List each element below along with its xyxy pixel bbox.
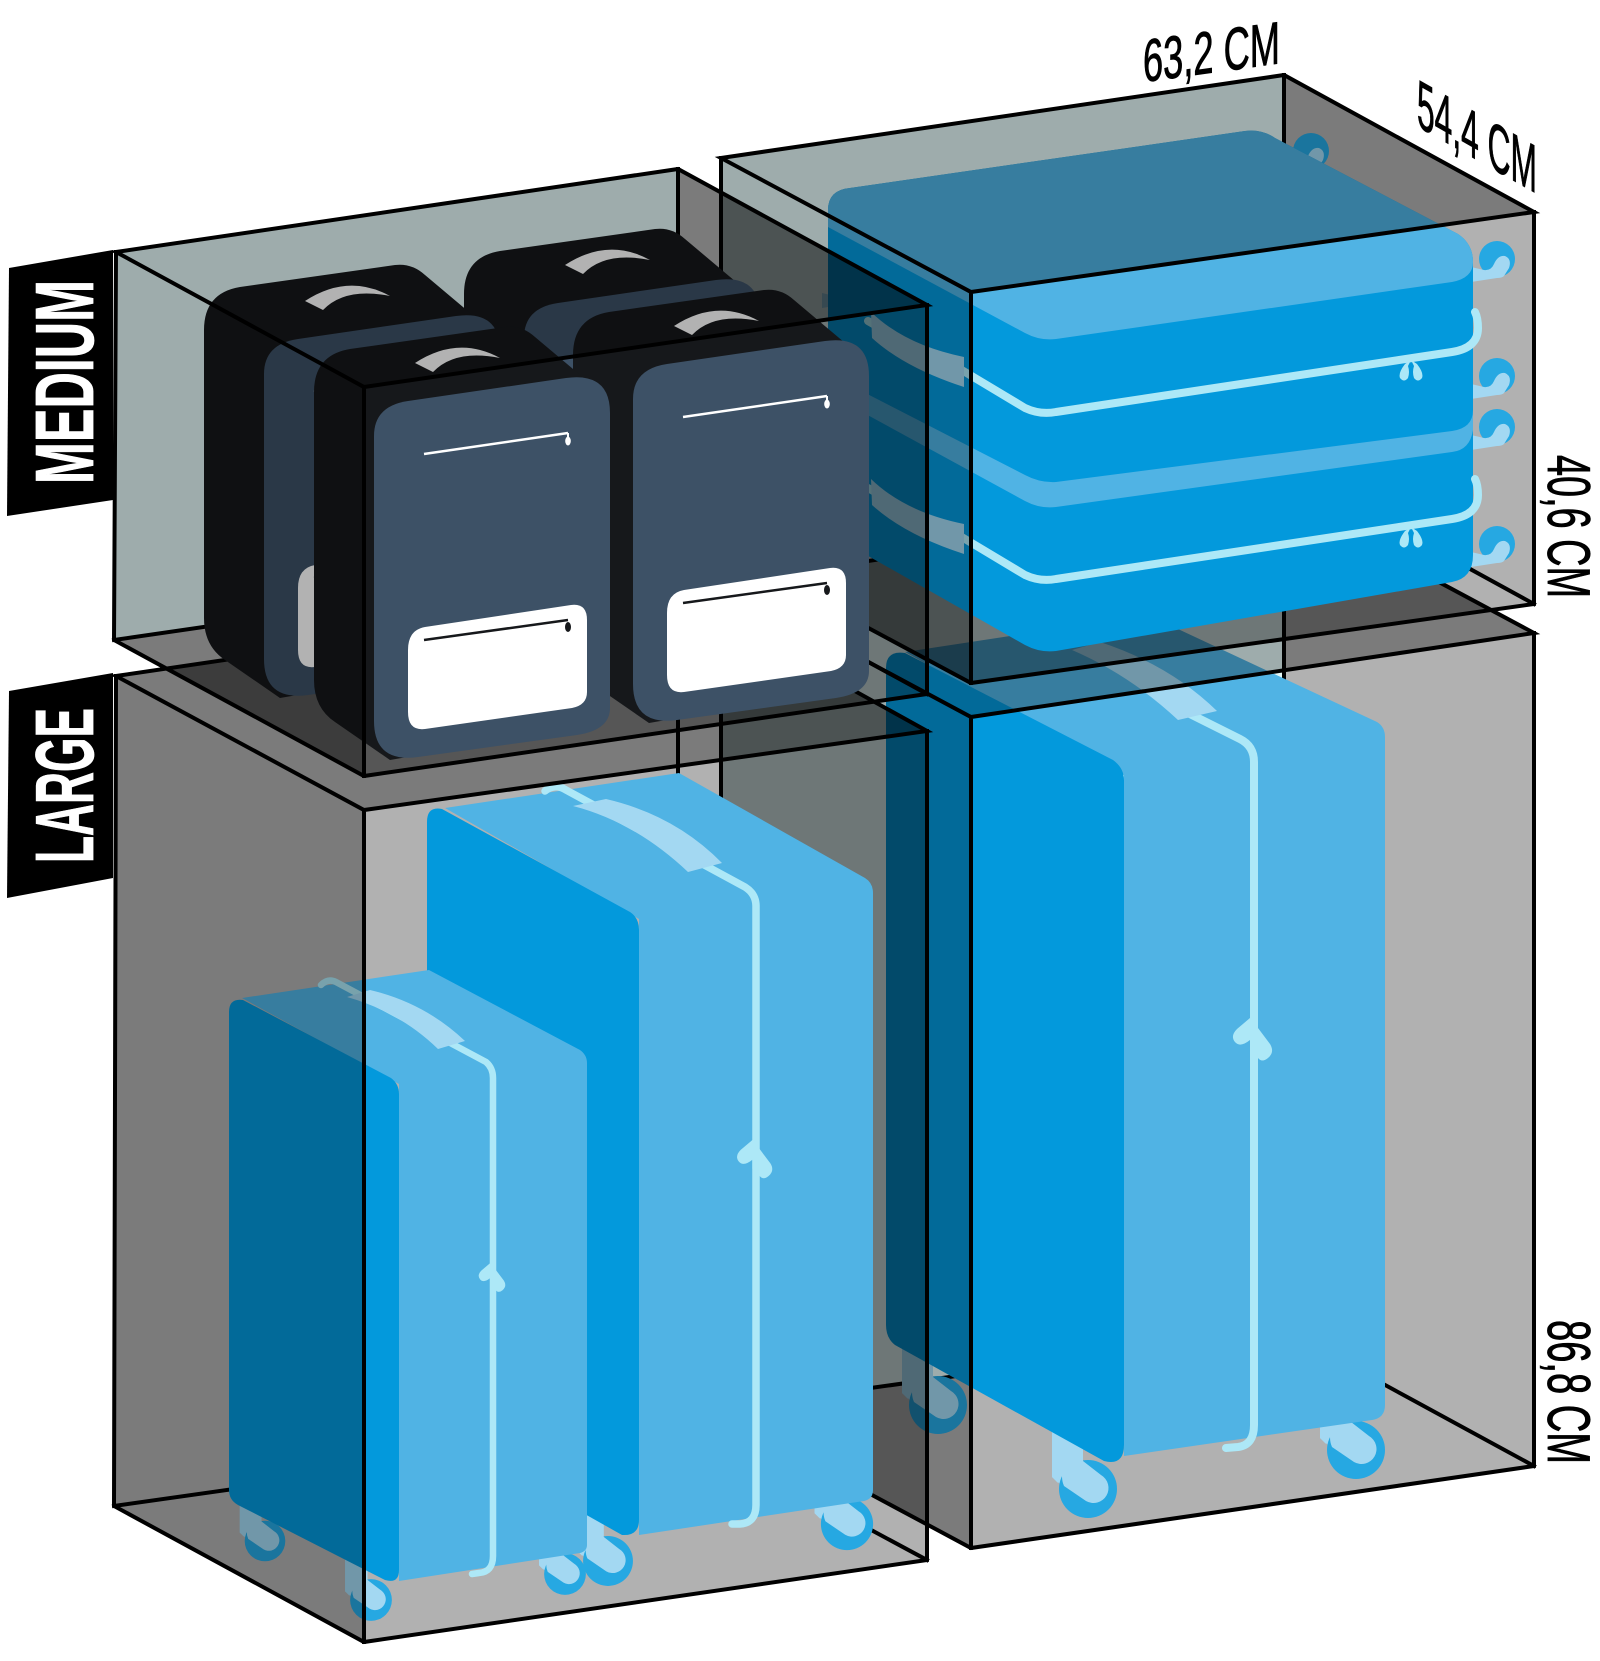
label tag: medium: MEDIUM xyxy=(18,280,111,484)
box walls: large right xyxy=(721,499,1534,1548)
suitcases: large left xyxy=(229,773,873,1621)
top and left shade: large left xyxy=(114,593,927,1642)
dimension: medium height: 40,6 CM xyxy=(1535,455,1600,598)
dimension: large height: 86,8 CM xyxy=(1535,1320,1600,1464)
box walls: medium left xyxy=(114,169,927,776)
box: large right xyxy=(721,499,1534,1548)
label tag: large: LARGE xyxy=(18,708,111,863)
box: large left xyxy=(114,593,927,1642)
box walls: large left xyxy=(114,593,927,1642)
box: medium left xyxy=(114,169,927,776)
label tag: medium xyxy=(7,250,113,516)
box walls: medium right xyxy=(721,75,1534,683)
suitcases: four dark cabin bags xyxy=(204,229,869,760)
label tag: large xyxy=(7,673,113,898)
top and left shade: medium right xyxy=(721,75,1534,683)
box: medium right xyxy=(721,75,1534,683)
suitcase: large right xyxy=(886,615,1385,1518)
top and left shade: medium left xyxy=(114,169,927,776)
suitcases: medium right stack xyxy=(822,131,1515,651)
top and left shade: large right xyxy=(721,499,1534,1548)
